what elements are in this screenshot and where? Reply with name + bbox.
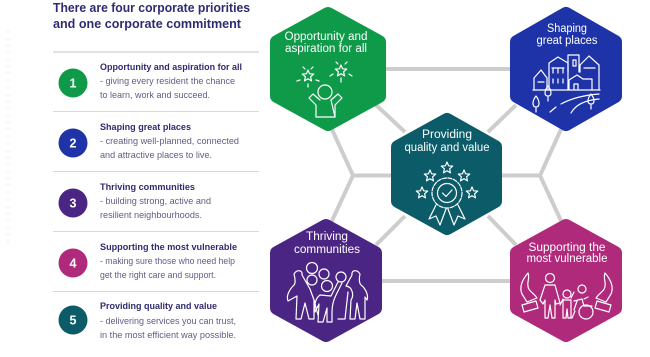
hexagon: shaping great places xyxy=(517,14,615,124)
list item 3 xyxy=(58,182,211,220)
hexagon: thriving communities: communities xyxy=(294,244,360,256)
hexagon: providing quality and value xyxy=(398,120,495,228)
connector network xyxy=(330,69,563,281)
icon: rosette with stars xyxy=(416,162,478,225)
list item 3: resilient neighbourhoods. xyxy=(100,210,202,220)
list item 5: in the most efficient way possible. xyxy=(100,330,236,340)
hexagon: supporting the most vulnerable: Supporting the xyxy=(528,242,606,254)
hexagon: thriving communities: Thriving xyxy=(306,231,348,243)
list item 3: 3 xyxy=(70,196,77,210)
list item 2: and attractive places to live. xyxy=(100,150,212,160)
list item 4 xyxy=(58,242,237,280)
hexagon: opportunity and aspiration xyxy=(277,14,379,124)
list item 4: 4 xyxy=(70,256,77,270)
icon: person with stars xyxy=(297,62,352,117)
hexagon: providing quality and value: Providing xyxy=(422,129,472,141)
list item 5 xyxy=(58,301,236,340)
list item 2 xyxy=(58,122,239,160)
list item 3: - building strong, active and xyxy=(100,196,211,206)
title xyxy=(53,0,250,31)
list item 4: get the right care and support. xyxy=(100,270,216,280)
title: There are four corporate priorities xyxy=(53,0,250,15)
hexagon: opportunity and aspiration: aspiration for all xyxy=(285,43,367,55)
list item 1: - giving every resident the chance xyxy=(100,76,235,86)
hexagon: thriving communities xyxy=(277,226,375,335)
title: and one corporate commitment xyxy=(53,16,242,31)
hexagon: supporting the most vulnerable xyxy=(517,226,615,335)
hexagon: providing quality and value: quality and value xyxy=(404,142,490,154)
hexagon: supporting the most vulnerable: most vulnerable xyxy=(526,253,608,265)
hexagon: shaping great places: Shaping xyxy=(547,23,587,35)
list item 5: 5 xyxy=(70,314,77,328)
list item 4: Supporting the most vulnerable xyxy=(100,242,237,252)
list item 1: 1 xyxy=(70,76,77,90)
list item 5: - delivering services you can trust, xyxy=(100,316,236,326)
icon: town xyxy=(533,55,600,113)
list item 2: 2 xyxy=(70,136,77,150)
list item 1: Opportunity and aspiration for all xyxy=(100,62,242,72)
list item 5: Providing quality and value xyxy=(100,301,217,311)
icon: group of people xyxy=(287,262,368,322)
icon: family and wheelchair between hands xyxy=(521,273,612,319)
list item 1: to learn, work and succeed. xyxy=(100,90,210,100)
hexagon: shaping great places: great places xyxy=(536,35,598,47)
list item 4: - making sure those who need help xyxy=(100,256,235,266)
list item 2: Shaping great places xyxy=(100,122,191,132)
list item 1 xyxy=(58,62,242,100)
list item 3: Thriving communities xyxy=(100,182,195,192)
hexagon: opportunity and aspiration: Opportunity and xyxy=(284,31,368,43)
list item 2: - creating well-planned, connected xyxy=(100,136,239,146)
